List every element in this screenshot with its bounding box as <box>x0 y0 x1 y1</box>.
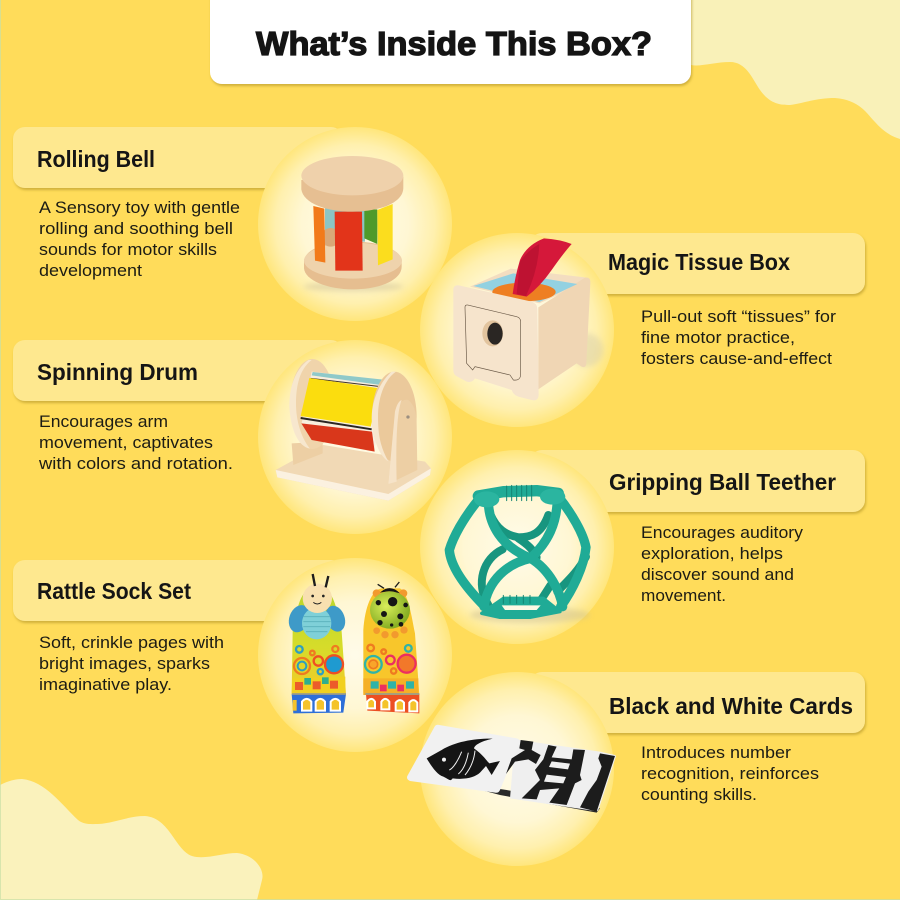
icon: black and white cards <box>407 725 616 813</box>
panel: black and white cards label <box>530 672 865 733</box>
text: gripping ball teether description <box>641 524 804 605</box>
panel: rattle sock set label <box>13 560 343 621</box>
text: spinning drum description: movement, captivates <box>39 434 213 452</box>
glow circle: spinning drum <box>258 340 452 534</box>
text: magic tissue box description: Pull-out soft “tissues” for <box>641 308 837 326</box>
text: spinning drum description: Encourages arm <box>39 413 168 431</box>
text: black and white cards description: counting skills. <box>641 786 757 804</box>
panel: magic tissue box label <box>530 233 865 294</box>
glow circle: gripping ball teether <box>420 450 614 644</box>
panel: spinning drum label <box>13 340 343 401</box>
heading: black and white cards: Black and White Cards <box>609 693 853 719</box>
text: rattle sock set description <box>39 634 224 694</box>
glow circle: rolling bell <box>258 127 452 321</box>
heading: rolling bell: Rolling Bell <box>37 146 155 172</box>
text: gripping ball teether description: exploration, helps <box>641 545 783 563</box>
text: rattle sock set description: bright images, sparks <box>39 655 210 673</box>
black stripes <box>506 740 615 812</box>
text: rolling bell description: development <box>39 262 142 280</box>
title: What’s Inside This Box? <box>256 25 652 62</box>
text: black and white cards description: Introduces number <box>641 744 792 762</box>
title panel <box>210 0 691 84</box>
text: gripping ball teether description: discover sound and <box>641 566 794 584</box>
text: rolling bell description: sounds for motor skills <box>39 241 217 259</box>
icon: magic tissue box toy <box>453 238 603 400</box>
text: spinning drum description <box>38 413 233 473</box>
text: magic tissue box description: fosters cause-and-effect <box>641 350 832 368</box>
text: rattle sock set description: imaginative play. <box>39 676 172 694</box>
heading: magic tissue box: Magic Tissue Box <box>608 249 790 275</box>
text: rolling bell description: rolling and soothing bell <box>39 220 233 238</box>
sock: left green <box>285 574 349 713</box>
icon: rolling bell toy <box>301 156 403 291</box>
glow circle: rattle sock set <box>258 558 452 752</box>
text: magic tissue box description <box>641 308 837 368</box>
icon: gripping ball teether toy <box>449 485 590 623</box>
sock: right yellow <box>363 582 419 713</box>
panel: rolling bell label <box>13 127 343 188</box>
heading: gripping ball teether: Gripping Ball Teether <box>609 469 836 495</box>
glow circle: magic tissue box <box>420 233 614 427</box>
decorative blob: top right <box>691 0 900 139</box>
panel: gripping ball teether label <box>530 450 865 512</box>
text: gripping ball teether description: Encourages auditory <box>641 524 804 542</box>
decorative blob: bottom left <box>0 779 263 900</box>
heading: spinning drum: Spinning Drum <box>37 359 198 385</box>
text: rolling bell description: A Sensory toy with gentle <box>39 199 240 217</box>
heading: rattle sock set: Rattle Sock Set <box>37 578 191 604</box>
text: magic tissue box description: fine motor practice, <box>641 329 795 347</box>
text: black and white cards description: recognition, reinforces <box>641 765 819 783</box>
icon: spinning drum toy <box>276 359 431 501</box>
text: black and white cards description <box>641 744 819 804</box>
text: rattle sock set description: Soft, crinkle pages with <box>39 634 224 652</box>
text: gripping ball teether description: movement. <box>641 587 726 605</box>
glow circle: black and white cards <box>420 672 614 866</box>
text: spinning drum description: with colors and rotation. <box>38 455 233 473</box>
text: rolling bell description <box>39 199 240 280</box>
fish <box>427 739 500 780</box>
icon: rattle socks toy <box>285 574 419 713</box>
